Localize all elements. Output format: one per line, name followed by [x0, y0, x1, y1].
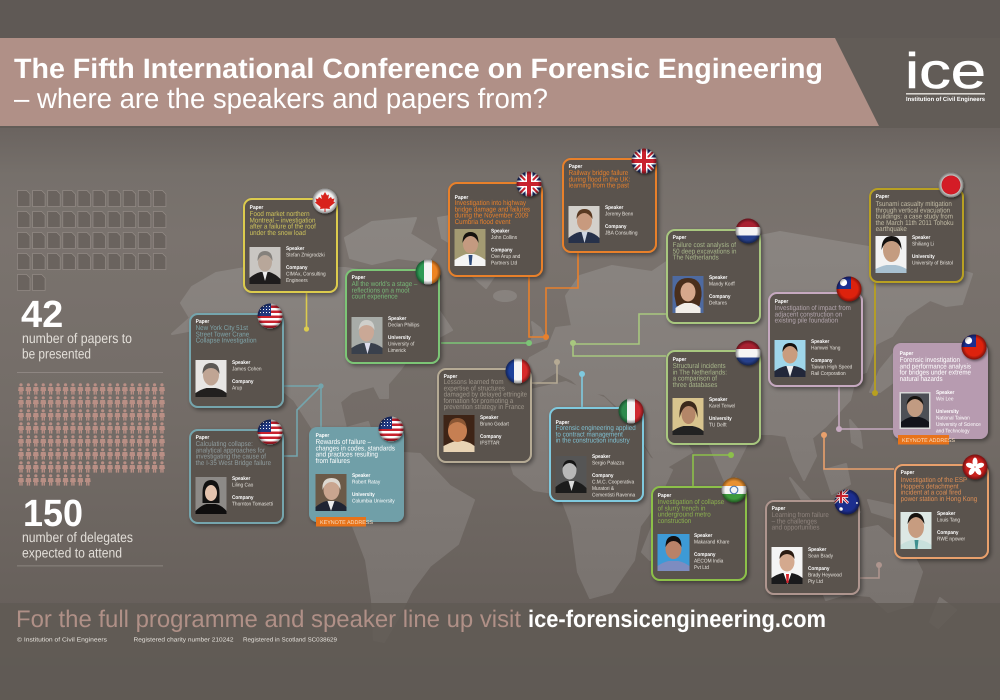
connector: India: [693, 452, 734, 486]
text: [316, 433, 395, 504]
text: Sergio Palazzo: [592, 460, 624, 466]
speaker photo: [454, 229, 486, 266]
panel: UK paper (Cumbria): [449, 171, 542, 276]
flag: Australia: [834, 489, 860, 515]
text: Calculating collapse:: [196, 440, 253, 448]
text: Karel Terwel: [709, 404, 735, 410]
connector: Australia: [860, 562, 882, 578]
text: [673, 357, 735, 428]
text: Speaker: [694, 533, 712, 539]
text: analytical approaches for: [196, 446, 266, 454]
text: [775, 299, 852, 377]
text: All the world’s a stage –: [352, 280, 417, 288]
text: from failures: [316, 457, 350, 465]
text: 50 deep excavations in: [673, 247, 736, 255]
text: Company: [232, 495, 254, 501]
text: Mandy Korff: [709, 282, 735, 288]
flag: Hong Kong: [962, 454, 988, 480]
panel: Netherlands paper (cost): [667, 218, 761, 323]
panel: Hong Kong paper: [895, 454, 988, 558]
text: Speaker: [912, 235, 930, 241]
stat: 150 delegates: 150: [23, 493, 83, 535]
text: Rail Corporation: [811, 371, 846, 377]
flag: Canada: [312, 188, 338, 214]
speaker photo: [658, 534, 690, 571]
text: incident at a coal fired: [901, 488, 961, 496]
text: the I-35 West Bridge failure: [196, 459, 271, 467]
ICE logo: Institution of Civil Engineers: [906, 96, 986, 103]
speaker photo: [672, 398, 704, 435]
text: Makarand Khare: [694, 540, 729, 546]
text: learning from the past: [569, 182, 629, 190]
text: Company: [709, 294, 731, 300]
text: Paper: [196, 319, 210, 325]
title banner: [0, 38, 879, 126]
text: of slurry trench in: [658, 504, 706, 512]
text: Sean Brady: [808, 554, 833, 560]
text: Speaker: [286, 246, 304, 252]
speaker photo: [568, 206, 600, 243]
text: and practices resulting: [316, 450, 378, 458]
text: to contract management: [556, 431, 623, 438]
speaker photo: [556, 456, 586, 493]
text: Company: [808, 566, 830, 572]
text: [569, 164, 638, 236]
text: [352, 275, 420, 354]
panel: India paper: [652, 477, 747, 580]
footer call to action: ice-forensicengineering.com: [528, 606, 826, 633]
flag: Taiwan: [836, 276, 862, 302]
text: Wei Lee: [936, 396, 954, 402]
panel: USA keynote paper: [309, 416, 404, 526]
panel: Italy paper: [550, 398, 644, 501]
panel: Netherlands paper (incidents): [667, 340, 761, 444]
text: Investigation of the ESP: [901, 476, 967, 484]
text: bridge damage and failures: [455, 205, 531, 213]
text: Learning from failure: [772, 511, 829, 519]
text: [901, 470, 977, 542]
footer call to action: [16, 606, 826, 633]
text: underground metro: [658, 510, 711, 518]
text: Taiwan High Speed: [811, 364, 852, 370]
papers pictogram: [18, 190, 166, 290]
text: JBA Consulting: [605, 230, 638, 236]
text: Speaker: [937, 511, 955, 517]
text: Investigation of impact from: [775, 304, 851, 312]
text: changes in codes, standards: [316, 444, 395, 452]
panel: Taiwan keynote paper: [893, 334, 988, 444]
ICE logo: ice: [905, 43, 986, 99]
text: Shiliang Li: [912, 242, 934, 248]
connector: UK: [529, 253, 578, 340]
text: Paper: [352, 275, 366, 281]
text: during flood in the UK:: [569, 175, 630, 183]
text: through vertical evacuation: [876, 206, 950, 214]
text: Company: [286, 265, 308, 271]
text: Company: [232, 379, 254, 385]
text: [556, 420, 636, 498]
text: University: [352, 492, 375, 498]
stat: 150 delegates: [22, 493, 133, 560]
text: Pvt Ltd: [694, 565, 709, 571]
text: Speaker: [808, 547, 826, 553]
text: Lessons learned from: [444, 378, 504, 386]
text: [658, 493, 729, 571]
text: Paper: [316, 433, 330, 439]
text: power station in Hong Kong: [901, 495, 977, 503]
text: Declan Phillips: [388, 322, 420, 328]
text: Paper: [444, 374, 458, 380]
text: and opportunities: [772, 524, 820, 532]
text: during the November 2009: [455, 212, 529, 220]
connector: Ireland: [441, 340, 532, 346]
text: Paper: [556, 420, 570, 426]
text: Hamwei Yang: [811, 346, 840, 352]
text: Jeremy Benn: [605, 212, 633, 218]
speaker photo: [774, 340, 806, 377]
text: Speaker: [352, 473, 370, 479]
text: Company: [592, 473, 614, 479]
text: after a failure of the roof: [250, 222, 316, 230]
text: [196, 319, 262, 392]
panel: France paper: [438, 358, 531, 462]
text: Speaker: [709, 397, 727, 403]
text: C.M.C. Cooperativa: [592, 480, 634, 486]
stat: 42 papers: number of papers to: [22, 330, 132, 346]
text: prevention strategy in France: [444, 403, 524, 411]
text: Robert Ratay: [352, 480, 381, 486]
speaker photo: [772, 547, 802, 584]
text: Louis Tang: [937, 518, 960, 524]
text: John Collins: [491, 235, 517, 241]
text: University of Bristol: [912, 260, 953, 266]
panel: Australia paper: [766, 489, 860, 594]
connector: Japan: [872, 283, 878, 396]
text: University: [912, 254, 935, 260]
text: Paper: [250, 205, 264, 211]
text: three databases: [673, 381, 718, 389]
text: Paper: [775, 299, 789, 305]
connector: Italy: [579, 371, 585, 407]
text: Paper: [900, 351, 914, 357]
speaker photo: [250, 247, 280, 284]
text: Ove Arup and: [491, 254, 520, 260]
flag: Netherlands: [735, 340, 761, 366]
text: and Technology: [936, 428, 970, 434]
text: Forensic engineering applied: [556, 424, 636, 432]
text: Liling Cao: [232, 482, 253, 488]
flag: Netherlands: [735, 218, 761, 244]
stat: 150 delegates: number of delegates: [22, 529, 133, 545]
text: Company: [694, 552, 716, 558]
world map: [172, 210, 972, 642]
text: the March 11th 2011 Tohoku: [876, 219, 954, 227]
text: James Cohen: [232, 366, 262, 372]
text: investigating the cause of: [196, 452, 266, 460]
speaker photo: [672, 276, 704, 313]
keynote tag: KEYNOTE ADDRESS: [902, 438, 955, 444]
title line 2: – where are the speakers and papers from?: [14, 83, 548, 114]
panel: USA paper (New York): [190, 303, 283, 407]
connector: Hong Kong: [821, 432, 894, 469]
top band: [0, 0, 1000, 38]
text: court experience: [352, 292, 398, 300]
delegates pictogram: [18, 383, 165, 486]
text: Limerick: [388, 348, 406, 354]
text: Muratori &: [592, 486, 614, 492]
text: for bridges under extreme: [900, 368, 971, 376]
text: Company: [605, 224, 627, 230]
text: The Netherlands: [673, 254, 719, 262]
text: Speaker: [480, 415, 498, 421]
panel: Canada paper: [244, 188, 338, 292]
text: Paper: [569, 164, 583, 170]
speaker photo: [444, 415, 474, 452]
connector: Netherlands: [570, 314, 666, 356]
text: [772, 506, 842, 585]
footer legal text: © Institution of Civil Engineers: [17, 636, 107, 644]
text: National Taiwan: [936, 416, 970, 422]
text: buildings: a case study from: [876, 212, 953, 220]
text: Speaker: [592, 454, 610, 460]
text: Partners Ltd: [491, 260, 517, 266]
text: a comparison of: [673, 374, 717, 382]
footer band: [0, 603, 1000, 700]
text: earthquake: [876, 225, 907, 233]
text: – the challenges: [772, 517, 817, 525]
text: Company: [937, 530, 959, 536]
text: Columbia University: [352, 498, 395, 504]
flag: India: [721, 477, 747, 503]
text: Street Tower Crane: [196, 331, 249, 338]
text: Investigation of collapse: [658, 498, 724, 506]
panel: USA paper (I-35 bridge): [190, 419, 283, 523]
text: Paper: [673, 357, 687, 363]
text: Paper: [772, 506, 786, 512]
text: Forensic investigation: [900, 356, 960, 364]
keynote tag: KEYNOTE ADDRESS: [320, 520, 373, 526]
text: RWE npower: [937, 536, 965, 542]
text: Paper: [673, 235, 687, 241]
text: Speaker: [491, 228, 509, 234]
text: Paper: [455, 195, 469, 201]
text: Montreal – investigation: [250, 216, 316, 224]
speaker photo: [196, 360, 226, 397]
text: construction: [658, 517, 691, 525]
text: Paper: [196, 435, 210, 441]
text: Speaker: [388, 316, 406, 322]
text: [444, 374, 527, 446]
text: University: [709, 416, 732, 422]
flag: Ireland: [415, 259, 441, 285]
text: Railway bridge failure: [569, 169, 628, 177]
text: natural hazards: [900, 375, 943, 383]
flag: UK: [631, 148, 657, 174]
text: Engineers: [286, 278, 308, 284]
flag: France: [505, 358, 531, 384]
text: in the construction industry: [556, 436, 630, 444]
text: Company: [811, 358, 833, 364]
flag: Japan: [938, 172, 964, 198]
text: Arup: [232, 386, 242, 392]
text: Paper: [658, 493, 672, 499]
text: Deltares: [709, 300, 727, 306]
text: Collapse Investigation: [196, 336, 257, 344]
text: and performance analysis: [900, 362, 971, 370]
text: CIMAx, Consulting: [286, 272, 326, 278]
title line 1: The Fifth International Conference on Forensic Engineering: [14, 53, 823, 84]
text: Speaker: [232, 476, 250, 482]
text: Speaker: [709, 275, 727, 281]
footer legal text: [17, 636, 338, 644]
text: Investigation into highway: [455, 199, 526, 207]
text: Rewards of failure –: [316, 438, 371, 446]
stat: 42 papers: [21, 294, 132, 362]
text: Tsunami casualty mitigation: [876, 200, 952, 208]
panel: Japan paper: [870, 172, 964, 282]
footer legal text: Registered in Scotland SC038629: [243, 636, 338, 644]
text: Paper: [901, 470, 915, 476]
panel: UK paper (railway): [563, 148, 657, 252]
text: Company: [480, 434, 502, 440]
text: New York City 51st: [196, 324, 248, 332]
flag: UK: [516, 171, 542, 197]
text: Hoppers detachment: [901, 482, 959, 490]
text: Speaker: [811, 339, 829, 345]
text: [250, 205, 326, 284]
text: Bruno Godart: [480, 422, 509, 428]
connector: Canada: [304, 293, 309, 332]
text: Cumbria flood event: [455, 218, 510, 226]
connector: Taiwan: [836, 387, 893, 432]
text: [455, 195, 531, 266]
panel: Taiwan paper (pile foundation): [769, 276, 862, 386]
text: Stefan Zmigrodzki: [286, 252, 325, 258]
stat: 150 delegates: expected to attend: [22, 544, 122, 560]
speaker photo: [876, 236, 906, 273]
text: damaged by delayed ettringite: [444, 390, 527, 398]
speaker photo: [316, 474, 346, 511]
text: University: [936, 409, 959, 415]
footer legal text: Registered charity number 210242: [134, 636, 234, 644]
text: under the snow load: [250, 229, 306, 237]
text: existing pile foundation: [775, 316, 838, 324]
text: Pty Ltd: [808, 579, 823, 585]
text: IFSTTAR: [480, 440, 500, 446]
text: University of: [388, 342, 415, 348]
speaker photo: [196, 477, 226, 514]
text: [673, 235, 736, 306]
text: Company: [491, 248, 513, 254]
text: Speaker: [936, 390, 954, 396]
flag: Taiwan: [961, 334, 987, 360]
text: Structural incidents: [673, 362, 726, 370]
flag: Italy: [618, 398, 644, 424]
text: in The Netherlands:: [673, 368, 727, 376]
text: Thornton Tomasetti: [232, 502, 273, 508]
flag: USA: [257, 303, 283, 329]
text: TU Delft: [709, 422, 727, 428]
text: formation for promoting a: [444, 397, 513, 405]
text: Brady Heywood: [808, 572, 842, 578]
text: AECOM India: [694, 558, 723, 564]
flag: USA: [257, 419, 283, 445]
text: [196, 435, 273, 508]
text: Food market northern: [250, 210, 310, 218]
header right panel: [0, 38, 1000, 128]
text: expertise of structures: [444, 384, 505, 392]
connector: France: [532, 359, 560, 383]
panel: Ireland paper: [346, 259, 441, 363]
text: [900, 351, 981, 434]
flag: USA: [378, 416, 404, 442]
text: Paper: [876, 194, 890, 200]
text: Failure cost analysis of: [673, 241, 736, 249]
text: Speaker: [605, 205, 623, 211]
speaker photo: [900, 392, 930, 429]
text: Cementisti Ravenna: [592, 492, 635, 498]
stat: 42 papers: 42: [21, 294, 63, 336]
text: Speaker: [232, 360, 250, 366]
text: University: [388, 335, 411, 341]
stat: 42 papers: be presented: [22, 346, 91, 362]
text: University of Science: [936, 422, 981, 428]
speaker photo: [900, 512, 932, 549]
footer call to action: For the full programme and speaker line up visit: [16, 606, 521, 633]
text: [876, 194, 954, 266]
connector: USA: [283, 383, 324, 456]
text: adjacent construction on: [775, 310, 842, 318]
speaker photo: [352, 317, 382, 354]
text: reflections on a moot: [352, 286, 410, 294]
